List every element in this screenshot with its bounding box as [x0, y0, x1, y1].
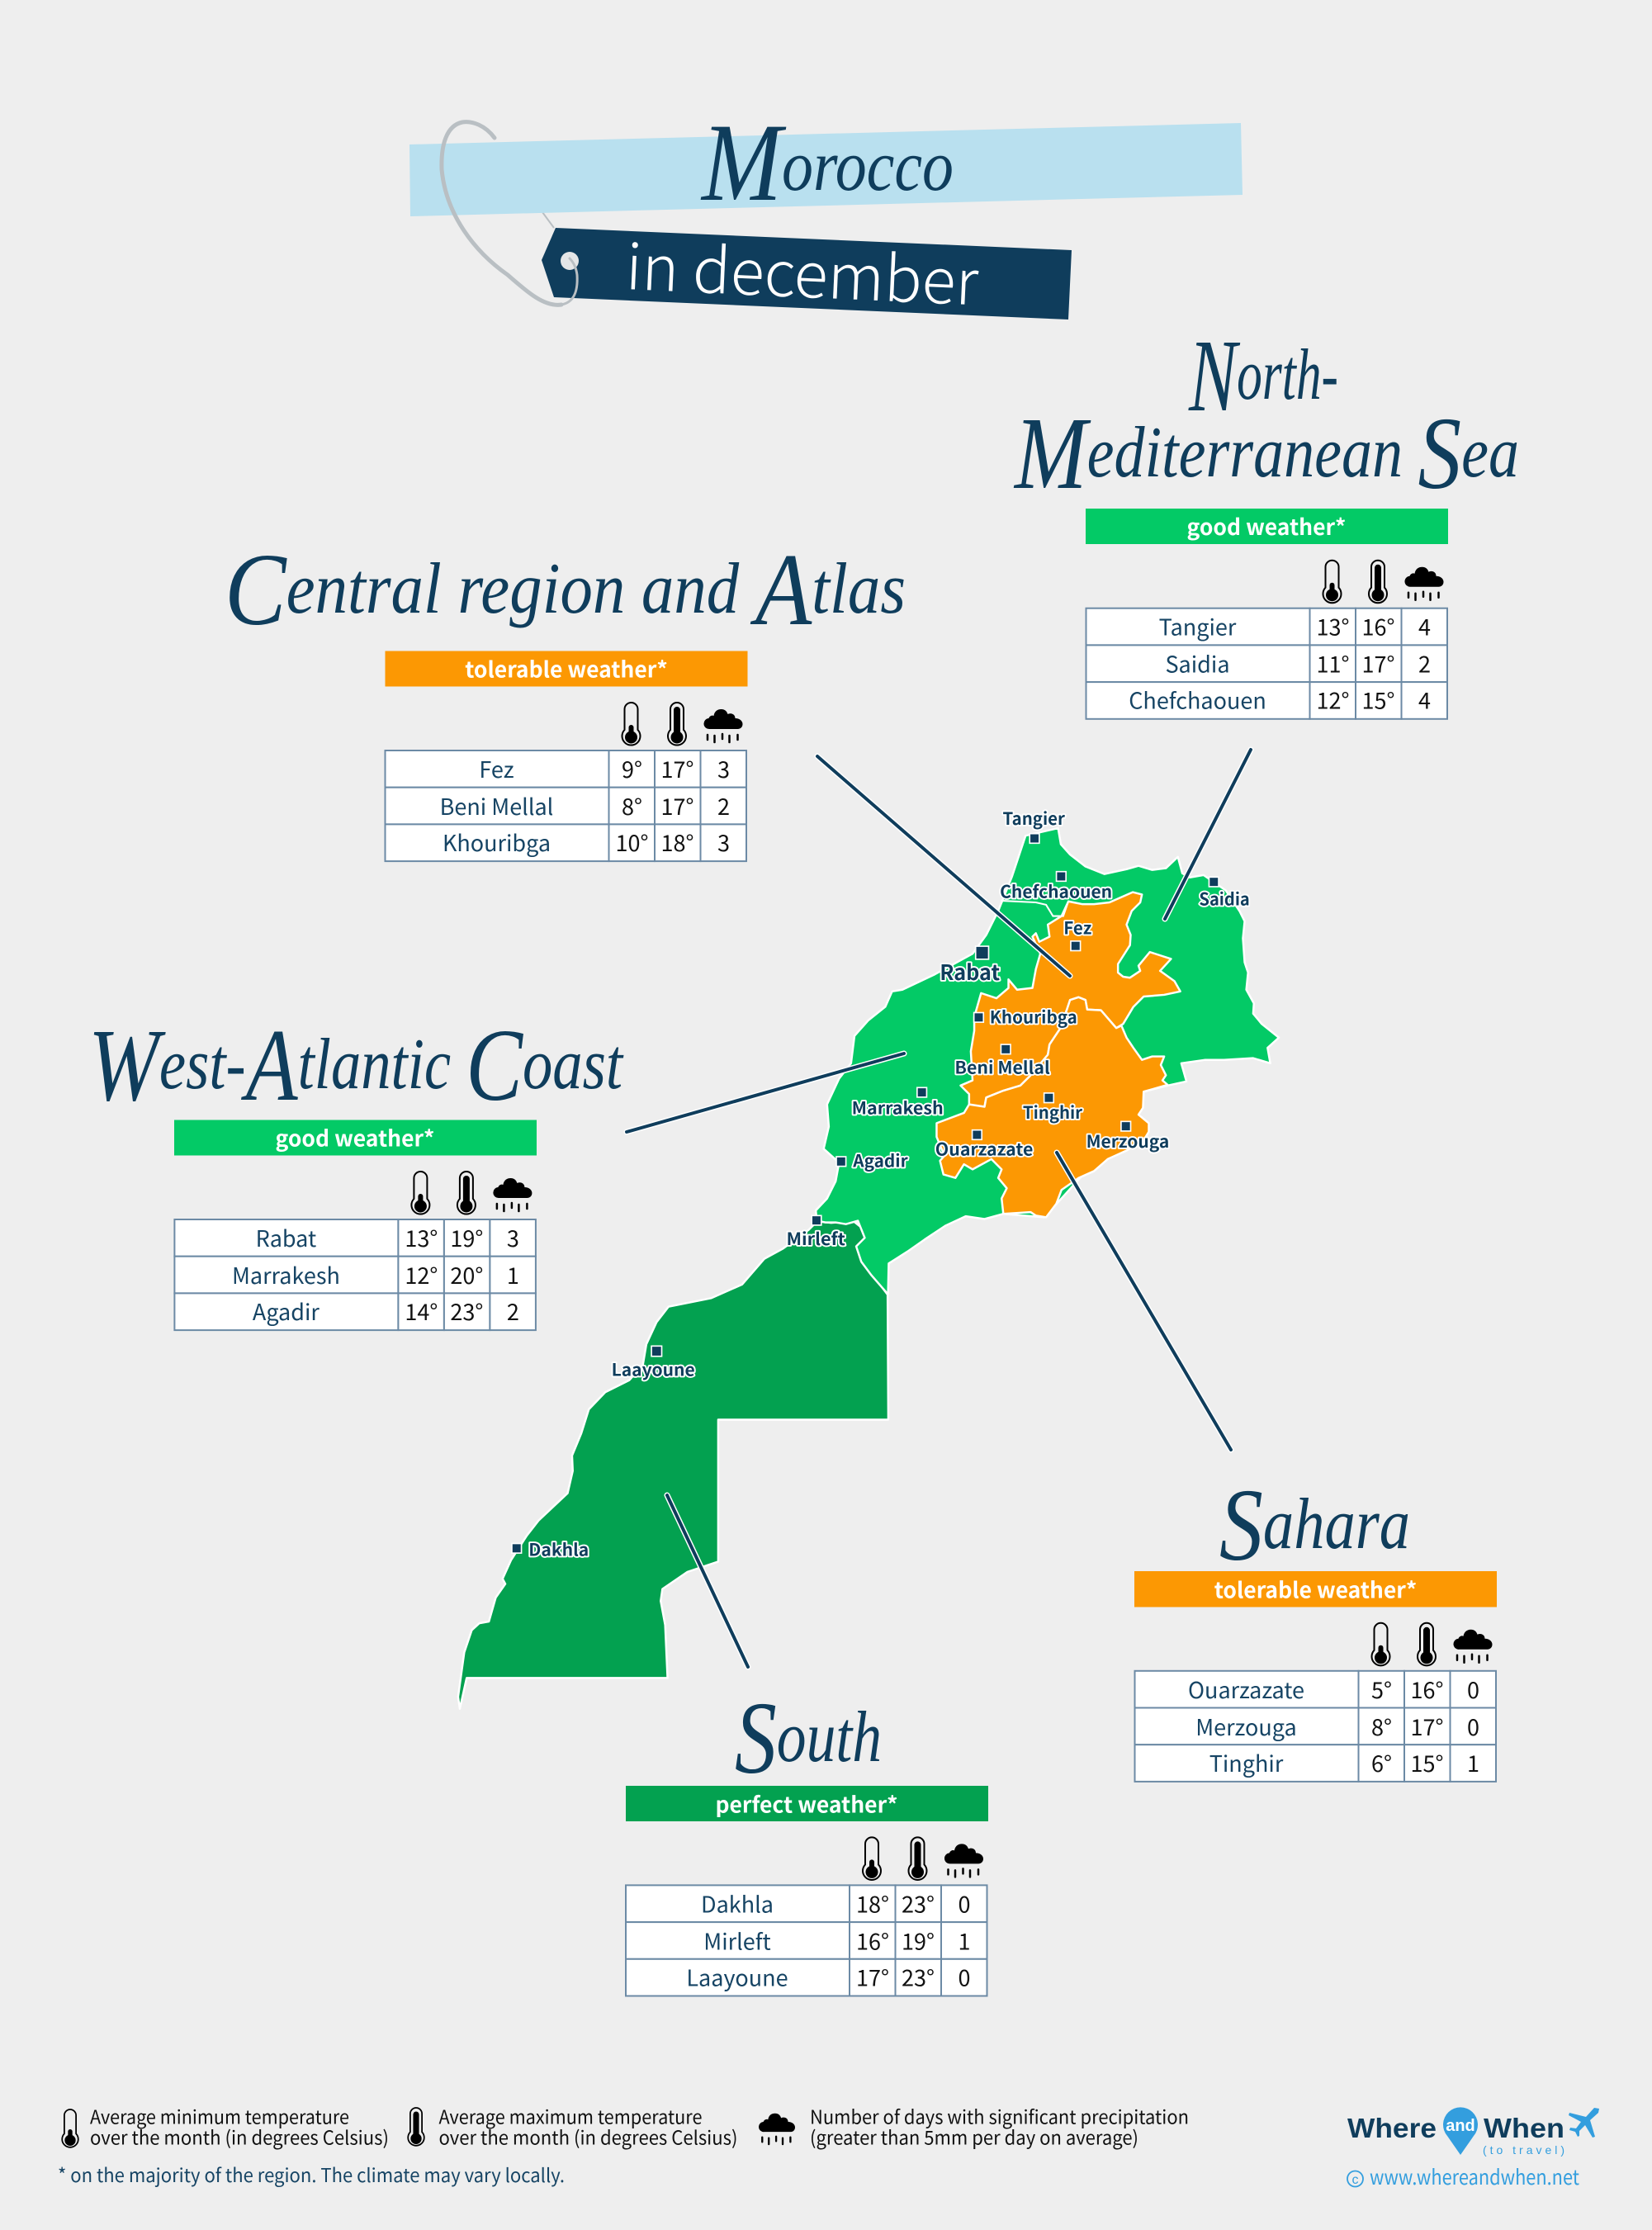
- climate table: Chefchaouen: [1129, 684, 1266, 716]
- heading: Central region and Atlas: entral region and: [286, 549, 755, 629]
- icon: minimum temperature: [62, 2109, 78, 2147]
- weather band: [385, 651, 748, 687]
- marker: Beni Mellal: [1001, 1045, 1010, 1053]
- climate table: 16°: [1362, 610, 1394, 642]
- climate table: 0: [958, 1887, 971, 1919]
- climate table: 19°: [902, 1924, 935, 1956]
- marker: Khouribga: [974, 1013, 982, 1021]
- label: Fez: Fez: [1063, 915, 1092, 940]
- climate table: 0: [1467, 1673, 1479, 1705]
- climate table: Saidia: [1165, 647, 1230, 679]
- heading: Mediterranean Sea: M: [1013, 397, 1091, 511]
- website link: www.whereandwhen.net: [1370, 2161, 1579, 2191]
- heading: West-Atlantic Coast: C: [466, 1009, 523, 1123]
- weather band: tolerable weather*: [1214, 1572, 1417, 1605]
- legend text: maximum temperature: over the month (in degrees Celsius): [439, 2122, 738, 2150]
- pointer: North: [1165, 750, 1251, 919]
- region boundary near Chefchaouen: [1001, 901, 1068, 916]
- heading: North-: orth-: [1237, 335, 1338, 415]
- climate table: 18°: [661, 826, 693, 858]
- legend text: precipitation: (greater than 5mm per day on average): [810, 2122, 1138, 2150]
- heading: West-Atlantic Coast: A: [241, 1009, 298, 1123]
- logo pin: and: [1446, 2117, 1475, 2135]
- panel: West-Atlantic Coast: [88, 1009, 624, 1330]
- marker: Dakhla: [513, 1544, 521, 1552]
- pointer: South: [667, 1495, 748, 1667]
- region: Sahara (orange): [936, 997, 1167, 1217]
- label: Merzouga: Merzouga: [1086, 1128, 1169, 1153]
- climate table: [385, 703, 746, 861]
- region: South (Western Sahara): [458, 1221, 888, 1709]
- climate table: Beni Mellal: [440, 789, 553, 821]
- climate table: 16°: [1411, 1673, 1443, 1705]
- pointer: Sahara: [1057, 1153, 1231, 1450]
- climate table: 16°: [856, 1924, 889, 1956]
- climate table: 15°: [1362, 684, 1394, 716]
- label: Khouribga: Khouribga: [990, 1003, 1077, 1028]
- legend: [58, 2102, 1189, 2188]
- climate table: 23°: [450, 1295, 483, 1327]
- climate table: Tangier: [1159, 610, 1237, 642]
- weather band: [626, 1786, 988, 1821]
- heading: North-: N: [1188, 320, 1241, 433]
- thin tag string behind ribbon: [542, 212, 554, 228]
- climate table: 23°: [902, 1887, 935, 1919]
- climate table: [1134, 1623, 1496, 1782]
- marker: Rabat: [977, 947, 988, 959]
- icon: precipitation: [759, 2114, 795, 2144]
- legend text: minimum temperature: Average minimum temperature: [90, 2102, 349, 2130]
- climate table: [1086, 561, 1447, 719]
- marker: Saidia: [1209, 878, 1218, 886]
- climate table: 9°: [622, 752, 642, 784]
- panel: South: [626, 1682, 988, 1996]
- climate table: 17°: [856, 1960, 889, 1992]
- label: Agadir: Agadir: [852, 1147, 909, 1172]
- marker: Marrakesh: [918, 1088, 926, 1096]
- climate table: 4: [1418, 684, 1431, 716]
- climate table: 12°: [1317, 684, 1349, 716]
- tag hole: [561, 252, 579, 270]
- climate table: Dakhla: [701, 1887, 774, 1919]
- climate table: 17°: [661, 752, 693, 784]
- climate table: 3: [717, 826, 730, 858]
- logo tagline: (to travel): [1483, 2143, 1564, 2157]
- weather band: [1134, 1571, 1497, 1607]
- heading: Mediterranean Sea: editerranean: [1087, 413, 1418, 493]
- copyright symbol: [1347, 2171, 1363, 2187]
- label: Marrakesh: Marrakesh: [852, 1095, 944, 1120]
- legend text: minimum temperature: over the month (in degrees Celsius): [90, 2122, 389, 2150]
- climate table: 1: [507, 1258, 519, 1290]
- label: Laayoune: Laayoune: [612, 1356, 695, 1380]
- marker: Mirleft: [812, 1216, 821, 1224]
- climate table: Marrakesh: [232, 1258, 340, 1290]
- climate table: [174, 1172, 536, 1330]
- label: Tangier: Tangier: [1002, 805, 1066, 830]
- climate table: 3: [717, 752, 730, 784]
- marker: Chefchaouen: [1057, 873, 1065, 880]
- heading: Central region and Atlas: C: [225, 533, 287, 647]
- climate table: [626, 1837, 987, 1996]
- climate table: 1: [1467, 1746, 1479, 1778]
- climate table: 5°: [1371, 1673, 1392, 1705]
- title banner: [409, 102, 1243, 323]
- marker: Ouarzazate: [973, 1131, 981, 1139]
- climate table: 1: [958, 1924, 971, 1956]
- heading: South: outh: [777, 1697, 882, 1778]
- label: Chefchaouen: Chefchaouen: [1000, 878, 1112, 903]
- marker: Laayoune: [652, 1347, 661, 1356]
- climate table: Laayoune: [686, 1960, 788, 1992]
- weather band: [174, 1120, 537, 1156]
- logo word: When: When: [1484, 2113, 1564, 2143]
- heading: Sahara: S: [1219, 1469, 1263, 1583]
- icon: airplane: [1569, 2108, 1599, 2138]
- heading: Mediterranean Sea: S: [1418, 397, 1461, 511]
- navy tag: [542, 228, 1072, 320]
- title: Morocco: orocco: [782, 126, 954, 206]
- label: Saidia: Saidia: [1199, 885, 1250, 910]
- weather band: good weather*: [276, 1121, 434, 1153]
- climate table: 0: [1467, 1710, 1479, 1742]
- tag string end: [561, 258, 577, 305]
- logo: Where and When: [1347, 2107, 1599, 2191]
- title ribbon: light blue: [409, 123, 1243, 216]
- panel: Sahara: [1134, 1469, 1497, 1782]
- heading: Central region and Atlas: A: [750, 533, 812, 647]
- logo pin: [1443, 2107, 1478, 2155]
- city labels and markers: [513, 805, 1250, 1560]
- climate table: 2: [717, 789, 730, 821]
- heading: Central region and Atlas: tlas: [812, 549, 906, 629]
- climate table: 8°: [622, 789, 642, 821]
- label: Beni Mellal: Beni Mellal: [954, 1053, 1050, 1078]
- legend text: maximum temperature: Average maximum temperature: [439, 2102, 702, 2130]
- climate table: 4: [1418, 610, 1431, 642]
- heading: Sahara: ahara: [1263, 1484, 1410, 1565]
- panel: Central region and Atlas: [225, 533, 906, 861]
- copyright symbol: c: [1352, 2173, 1359, 2187]
- climate table: Khouribga: [443, 826, 551, 858]
- climate table: Mirleft: [703, 1924, 771, 1956]
- title: Morocco: M: [700, 102, 787, 225]
- legend text: minimum temperature: [90, 2102, 389, 2150]
- legend text: precipitation: Number of days with significant precipitation: [810, 2102, 1189, 2130]
- tag string loop: [442, 122, 561, 305]
- marker: Tangier: [1030, 835, 1039, 842]
- climate table: Tinghir: [1209, 1746, 1284, 1778]
- pointer: West: [627, 1053, 904, 1132]
- heading: Mediterranean Sea: ea: [1461, 413, 1519, 493]
- climate table: 0: [958, 1960, 971, 1992]
- climate table: 2: [1418, 647, 1431, 679]
- label: Dakhla: Dakhla: [528, 1536, 589, 1560]
- marker: Merzouga: [1122, 1122, 1130, 1130]
- climate table: 13°: [405, 1221, 438, 1253]
- label: Ouarzazate: Ouarzazate: [935, 1135, 1033, 1160]
- map of Morocco: [458, 805, 1279, 1709]
- marker: Tinghir: [1044, 1094, 1053, 1102]
- climate table: 12°: [405, 1258, 438, 1290]
- icon: maximum temperature: [408, 2108, 424, 2146]
- climate table: 11°: [1317, 647, 1349, 679]
- footnote: * on the majority of the region. The climate may vary locally.: [58, 2160, 565, 2188]
- climate table: Ouarzazate: [1188, 1673, 1304, 1705]
- climate table: 8°: [1371, 1710, 1392, 1742]
- weather band: tolerable weather*: [465, 652, 668, 684]
- climate table: 19°: [450, 1221, 483, 1253]
- label: Mirleft: Mirleft: [786, 1225, 845, 1250]
- climate table: 20°: [450, 1258, 483, 1290]
- legend text: precipitation: [810, 2102, 1189, 2150]
- climate table: 2: [507, 1295, 519, 1327]
- climate table: 17°: [661, 789, 693, 821]
- heading: West-Atlantic Coast: W: [88, 1009, 166, 1123]
- panel: North-Mediterranean Sea: [1013, 320, 1519, 719]
- climate table: 14°: [405, 1295, 438, 1327]
- region: Central region and Atlas (orange): [960, 892, 1181, 1106]
- heading: West-Atlantic Coast: oast: [523, 1025, 624, 1105]
- pointer: Central region: [817, 756, 1070, 976]
- marker: Agadir: [837, 1158, 845, 1166]
- climate table: 15°: [1411, 1746, 1443, 1778]
- climate table: Fez: [479, 752, 514, 784]
- label: Tinghir: Tinghir: [1023, 1099, 1083, 1124]
- climate table: 10°: [616, 826, 648, 858]
- climate table: 13°: [1317, 610, 1349, 642]
- region: West-Atlantic and North (green): [816, 828, 1279, 1295]
- climate table: 23°: [902, 1960, 935, 1992]
- climate table: Rabat: [256, 1221, 316, 1253]
- legend text: maximum temperature: [439, 2102, 738, 2150]
- weather band: good weather*: [1187, 509, 1346, 542]
- subtitle: in december: in december: [624, 216, 981, 323]
- climate table: Agadir: [253, 1295, 320, 1327]
- marker: Fez: [1072, 942, 1080, 950]
- climate table: 3: [507, 1221, 519, 1253]
- heading: West-Atlantic Coast: tlantic: [298, 1025, 466, 1105]
- heading: South: S: [735, 1682, 777, 1796]
- climate table: Merzouga: [1195, 1710, 1297, 1742]
- climate table: 18°: [856, 1887, 889, 1919]
- climate table: 17°: [1362, 647, 1394, 679]
- logo word: Where: Where: [1347, 2113, 1437, 2143]
- climate table: 6°: [1371, 1746, 1392, 1778]
- weather band: perfect weather*: [715, 1787, 898, 1820]
- weather band: [1086, 509, 1448, 544]
- heading: West-Atlantic Coast: est-: [159, 1025, 246, 1105]
- label: Rabat: Rabat: [940, 956, 1000, 987]
- climate table: 17°: [1411, 1710, 1443, 1742]
